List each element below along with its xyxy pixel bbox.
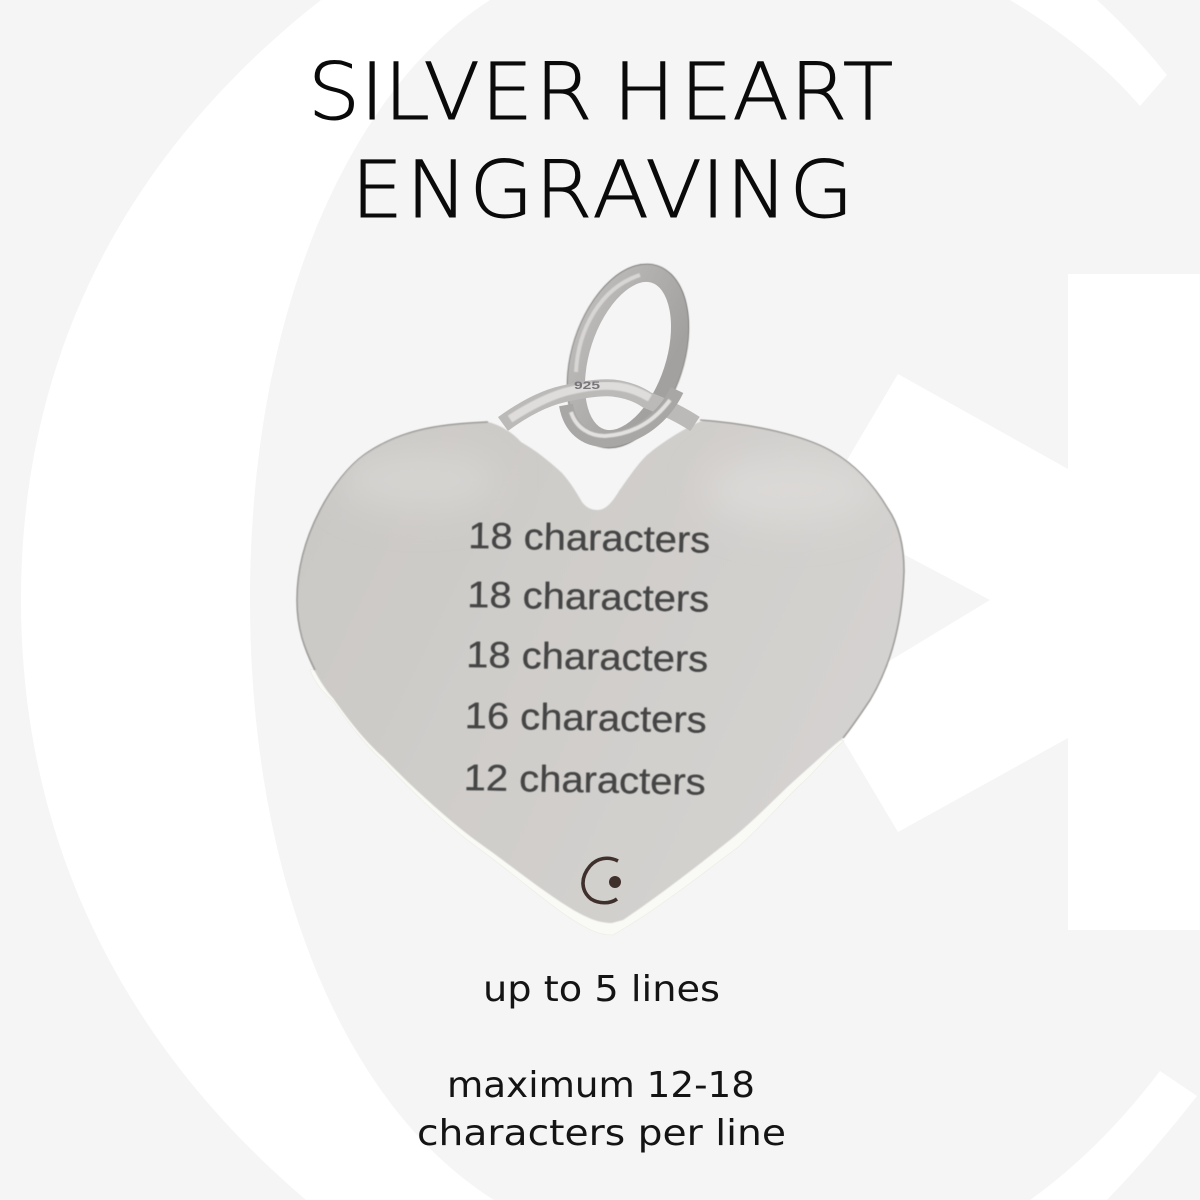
heart body: [297, 420, 904, 923]
line 2: 18 characters: [467, 574, 710, 620]
engraved text lines: [463, 515, 711, 803]
caption: line count: up to 5 lines: [483, 969, 720, 1010]
silver heart pendant: [297, 248, 904, 935]
title line 2: ENGRAVING: [351, 144, 853, 235]
title line 1: SILVER HEART: [308, 46, 893, 137]
heart rim highlight: [310, 650, 844, 935]
line 3: 18 characters: [466, 634, 709, 680]
watermark: maple leaf shape: [820, 274, 1200, 930]
line 5: 12 characters: [463, 757, 706, 803]
caption: per line: characters per line: [417, 1113, 786, 1154]
icon: maker's mark: [583, 858, 621, 903]
jump ring arc: [503, 386, 695, 424]
caption: [417, 969, 786, 1154]
bail ring front segment: [566, 390, 677, 440]
oval bail ring: [545, 248, 711, 464]
caption: maximum: maximum 12-18: [447, 1065, 755, 1106]
title: [308, 46, 893, 235]
heart edge shading: [297, 420, 904, 738]
ring stamp 925: 925: [574, 380, 600, 392]
line 4: 16 characters: [464, 695, 707, 741]
line 1: 18 characters: [468, 515, 711, 561]
heart surface sheen: [340, 450, 875, 525]
